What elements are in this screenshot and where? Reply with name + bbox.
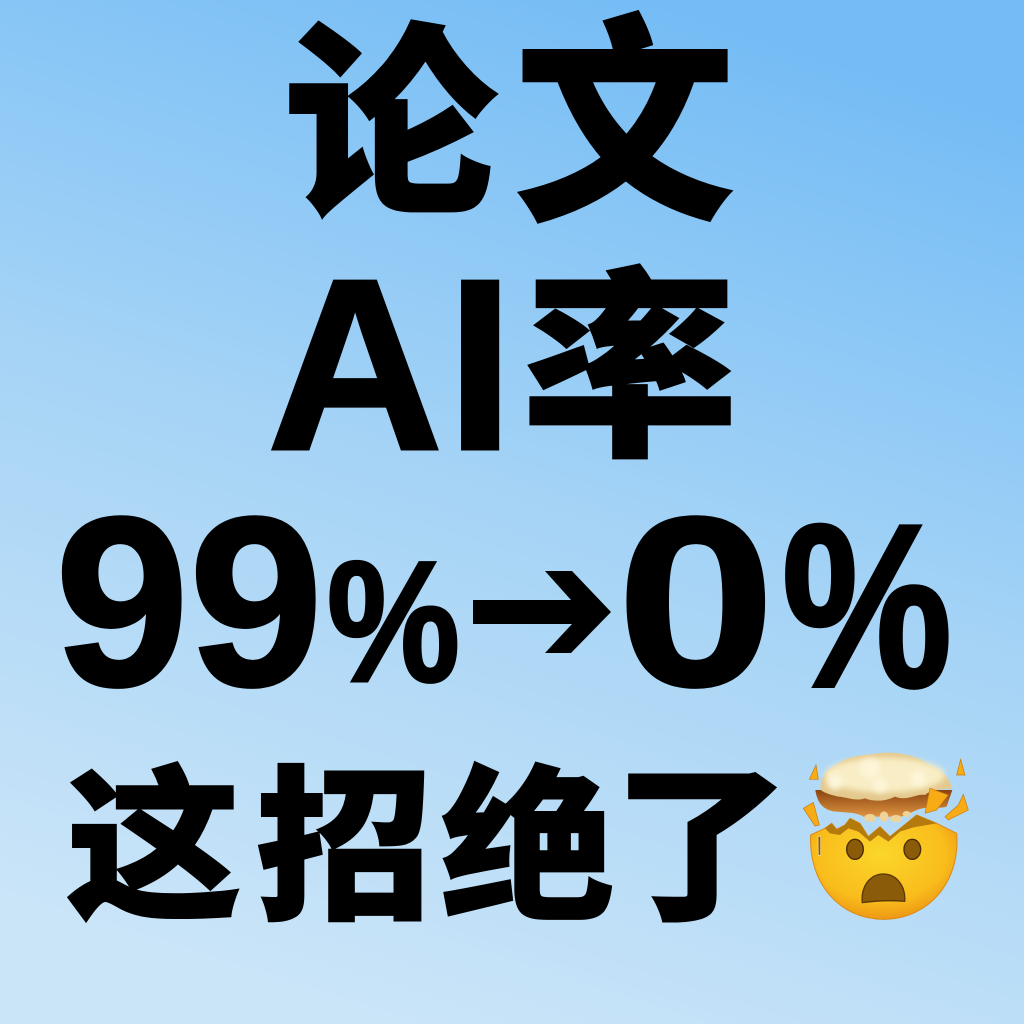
- title line 3: 99: 99: [55, 468, 323, 737]
- face: [811, 815, 957, 919]
- title line 1: second character: 文: [514, 3, 735, 249]
- title line 3: 0: 0: [617, 468, 775, 737]
- smoke puffs: [864, 811, 911, 822]
- title line 4: first character: 这: [66, 756, 242, 941]
- icon: exploding head emoji: [803, 753, 968, 919]
- left crack slit: [818, 836, 821, 856]
- large percent sign: %: [782, 477, 952, 736]
- title line 1: first character: 论: [284, 11, 498, 242]
- title line 4: fourth character: 了: [613, 756, 789, 941]
- eyes: [847, 839, 921, 859]
- mushroom stem: [815, 790, 952, 817]
- title line 4: third character: 绝: [440, 756, 616, 941]
- forehead crack shading: [825, 815, 937, 842]
- small percent sign: %: [327, 526, 460, 718]
- mouth: [862, 874, 905, 903]
- title line 4: second character: 招: [256, 756, 432, 941]
- title line 2: rate character: 率: [522, 256, 738, 483]
- debris fragments: [803, 759, 968, 826]
- arrow: [473, 571, 611, 653]
- title line 2: AI: AI: [267, 228, 517, 501]
- cloud: [821, 753, 952, 801]
